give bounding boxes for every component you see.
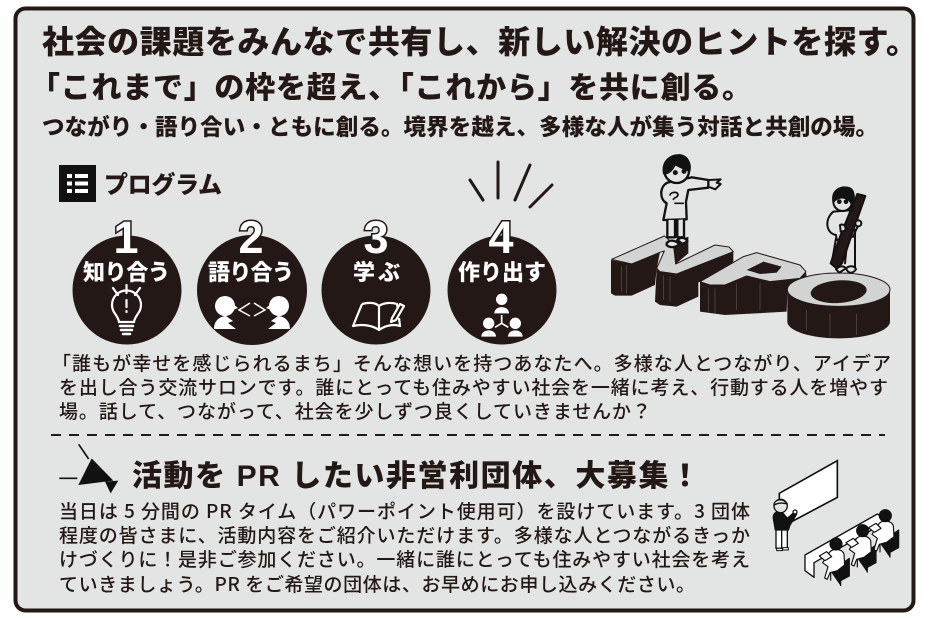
step 3: 学ぶ xyxy=(322,212,430,344)
emphasis rays above step 4 xyxy=(470,162,552,207)
letter O xyxy=(787,273,890,338)
table xyxy=(805,514,888,577)
heading block: つながり・語り合い・ともに創る。境界を越え、多様な人が集う対話と共創の場。 xyxy=(42,114,878,140)
icon: light bulb xyxy=(112,285,141,334)
step 1: 知り合う: 知り合う xyxy=(83,260,170,285)
icon: open book and pen xyxy=(353,303,404,330)
seated person middle xyxy=(846,525,876,573)
illustration: presentation to seated audience xyxy=(773,461,899,586)
step 3: 学ぶ: 3 xyxy=(363,212,389,263)
icon: megaphone xyxy=(59,444,118,493)
recruitment paragraph xyxy=(59,497,750,597)
step 4: 作り出す: 作り出す xyxy=(458,260,546,285)
heading block: 「これまで」の枠を超え、「これから」を共に創る。 xyxy=(30,72,752,105)
description paragraph: 場。話して、つながって、社会を少しずつ良くしていきませんか？ xyxy=(59,397,651,424)
step 1: 知り合う: 1 xyxy=(113,212,139,263)
seated person back xyxy=(869,510,899,558)
step 3: 学ぶ: 学ぶ xyxy=(353,260,400,285)
step 4: 作り出す: 4 xyxy=(488,212,514,263)
program heading xyxy=(59,165,222,202)
recruitment paragraph: 当日は 5 分間の PR タイム（パワーポイント使用可）を設けています。3 団体 xyxy=(59,497,750,524)
step 4: 作り出す xyxy=(448,212,556,344)
recruitment paragraph: けづくりに！是非ご参加ください。一緒に誰にとっても住みやすい社会を考え xyxy=(59,545,750,572)
presenter xyxy=(773,499,797,551)
illustration: NPO letters with two people xyxy=(611,155,890,338)
person pointing xyxy=(661,155,721,247)
icon: network of people xyxy=(481,294,523,337)
icon: two people talking xyxy=(214,296,290,329)
recruitment heading: 活動を PR したい非営利団体、大募集！ xyxy=(132,460,700,493)
letter P xyxy=(700,253,807,315)
whiteboard xyxy=(779,461,837,524)
recruitment paragraph: 程度の皆さまに、活動内容をご紹介いただけます。多様な人とつながるきっか xyxy=(59,521,750,548)
step 2: 語り合う: 2 xyxy=(238,212,264,263)
step 1: 知り合う xyxy=(72,212,182,344)
recruitment paragraph: ていきましょう。PR をご希望の団体は、お早めにお申し込みください。 xyxy=(59,570,695,597)
description paragraph: 「誰もが幸せを感じられるまち」そんな想いを持つあなたへ。多様な人とつながり、アイデア xyxy=(52,349,891,376)
description paragraph xyxy=(52,349,891,424)
step 2: 語り合う: 語り合う xyxy=(208,260,294,285)
description paragraph: を出し合う交流サロンです。誰にとっても住みやすい社会を一緒に考え、行動する人を増やす xyxy=(59,373,888,400)
letter N xyxy=(611,236,733,307)
icon: list xyxy=(59,165,96,202)
step 2: 語り合う xyxy=(197,212,307,345)
seated person front xyxy=(819,538,849,586)
heading block: 社会の課題をみんなで共有し、新しい解決のヒントを探す。 xyxy=(42,24,918,60)
person with giant pencil xyxy=(827,187,865,273)
program heading: プログラム xyxy=(104,171,222,199)
heading block xyxy=(30,24,918,140)
dashed divider xyxy=(51,434,885,436)
